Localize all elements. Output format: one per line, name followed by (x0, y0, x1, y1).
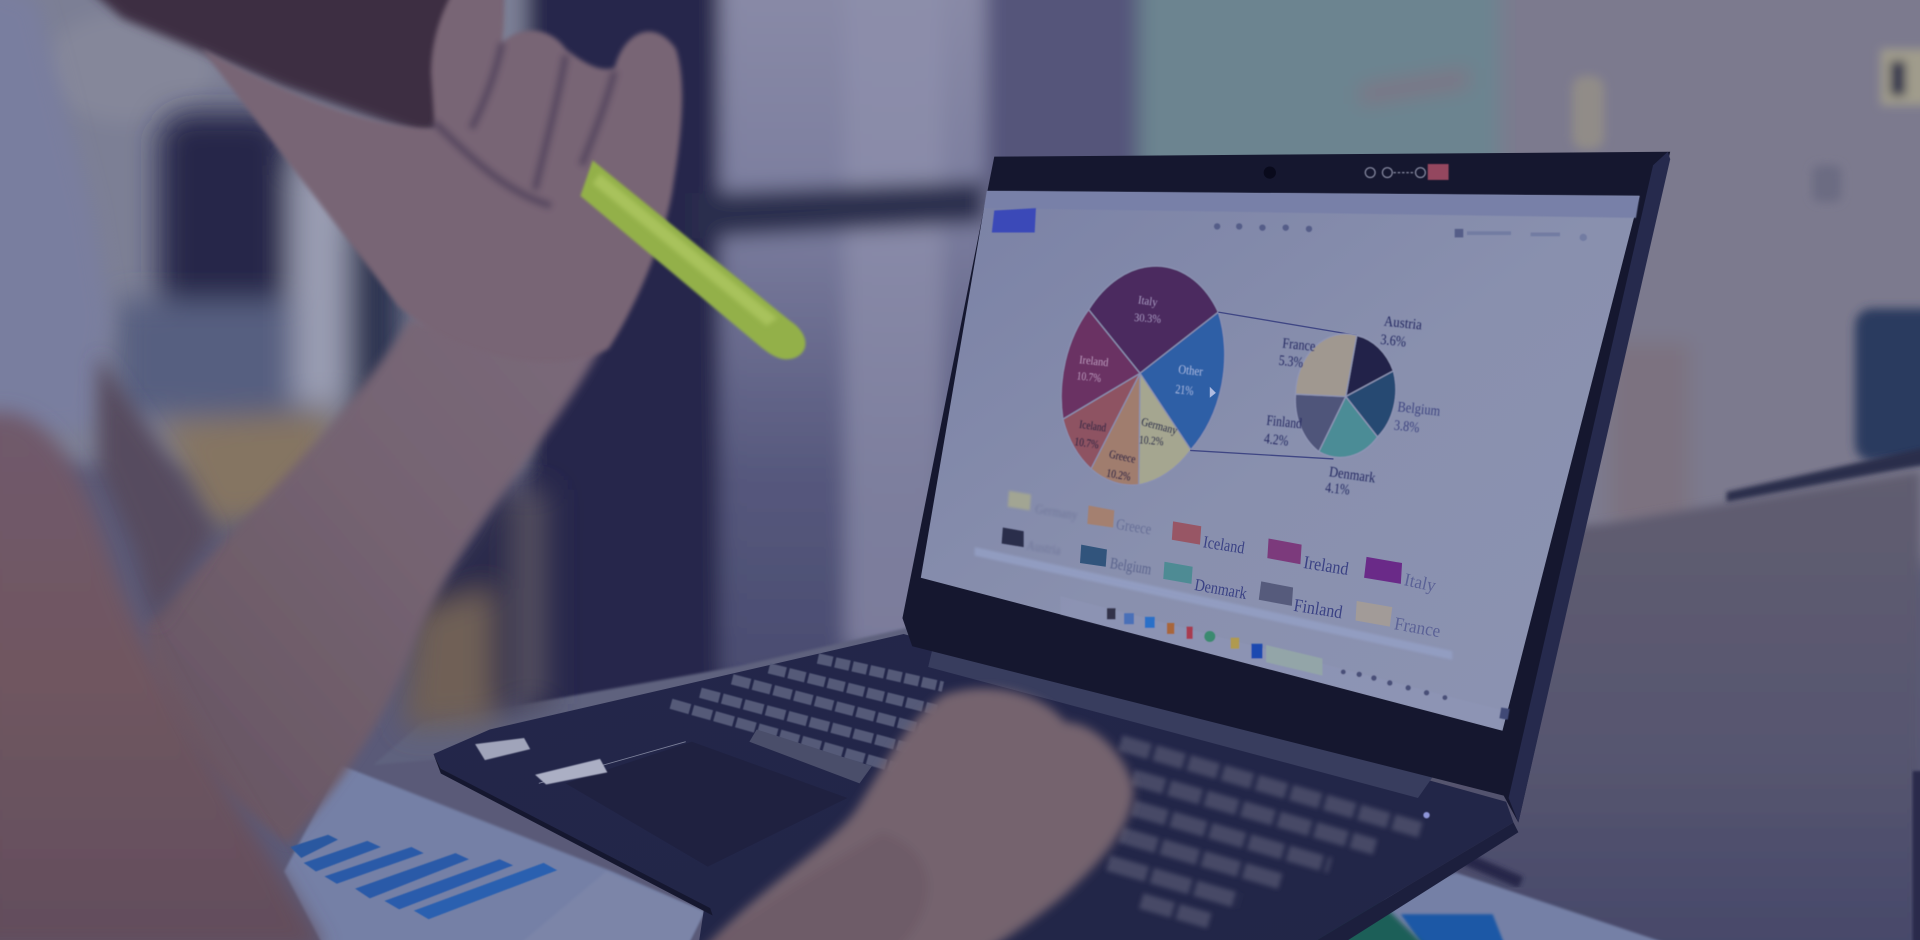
small pie labels: 3.6% (1380, 332, 1407, 351)
small pie labels: Belgium (1397, 399, 1442, 420)
small pie labels: France (1282, 336, 1317, 355)
paper with bar chart, left (284, 765, 704, 940)
legend labels: Denmark (1193, 575, 1249, 603)
small pie labels: Finland (1266, 413, 1303, 432)
legend labels: Iceland (1202, 532, 1246, 558)
raised forearm (147, 318, 600, 845)
finger creases (435, 43, 615, 206)
legend labels: Belgium (1109, 555, 1153, 578)
small pie labels: Austria (1383, 314, 1423, 334)
desk surface (373, 446, 1920, 940)
pie labels: Germany (1140, 415, 1179, 437)
app button (992, 208, 1036, 233)
hair and head (73, 0, 502, 135)
legend labels: Germany (1034, 501, 1079, 523)
legend (1002, 491, 1442, 641)
webcam (1264, 166, 1276, 179)
legend labels: Finland (1292, 595, 1344, 622)
trackpad (566, 742, 847, 867)
foreground shoulder (0, 412, 324, 940)
legend swatches (1002, 491, 1402, 627)
pie labels: Other (1178, 362, 1204, 379)
connector lines (1190, 312, 1357, 459)
highlighter pen (580, 160, 805, 359)
secondary pie chart (1263, 314, 1442, 499)
pie labels: Italy (1137, 294, 1159, 309)
small pie labels: Denmark (1328, 464, 1377, 487)
legend labels: Greece (1115, 516, 1153, 538)
right keys (1108, 743, 1420, 922)
pie labels: 10.2% (1105, 467, 1132, 484)
raised fist (202, 0, 682, 362)
legend labels (1026, 501, 1442, 641)
pie labels: 10.2% (1139, 433, 1164, 448)
paper with chart, right (1309, 858, 1682, 940)
small pie slices (1295, 334, 1396, 457)
hinge (928, 646, 1435, 798)
screen (921, 191, 1640, 731)
toolbar icons (1214, 223, 1587, 241)
main pie chart (1061, 266, 1225, 485)
window title bar (984, 191, 1640, 218)
pie labels: 30.3% (1134, 311, 1162, 326)
windows taskbar (1060, 596, 1510, 729)
pie labels (1074, 294, 1204, 484)
pie labels: 10.7% (1076, 369, 1102, 385)
legend labels: Austria (1026, 538, 1062, 558)
legend labels: Ireland (1302, 552, 1350, 579)
person's shirt (0, 0, 110, 441)
screen bezel (902, 152, 1670, 823)
sticker labels (475, 738, 530, 760)
upper arm shadow (98, 355, 214, 624)
pie labels: Ireland (1079, 353, 1109, 369)
pie slices (1061, 266, 1225, 485)
typing hand (698, 688, 1133, 940)
laptop base (433, 634, 1518, 940)
screen scroll band (975, 547, 1452, 660)
pie labels: Iceland (1078, 418, 1107, 434)
cursor (1210, 387, 1216, 398)
small pie labels: 4.2% (1263, 431, 1289, 450)
bar chart on paper (290, 835, 557, 919)
small pie labels (1263, 314, 1442, 499)
small pie labels: 5.3% (1278, 353, 1304, 371)
left keys (671, 658, 943, 769)
small pie labels: 4.1% (1324, 480, 1351, 499)
small pie labels: 3.8% (1393, 418, 1420, 436)
background objects left: jar, window, wood (116, 113, 551, 728)
legend labels: France (1393, 613, 1442, 641)
camera stickers (1365, 164, 1449, 180)
legend labels: Italy (1402, 569, 1438, 596)
pie labels: 21% (1175, 382, 1195, 398)
pie labels: 10.7% (1074, 435, 1100, 451)
space bar (749, 729, 872, 783)
pie labels: Greece (1108, 448, 1137, 466)
laptop (433, 152, 1670, 940)
